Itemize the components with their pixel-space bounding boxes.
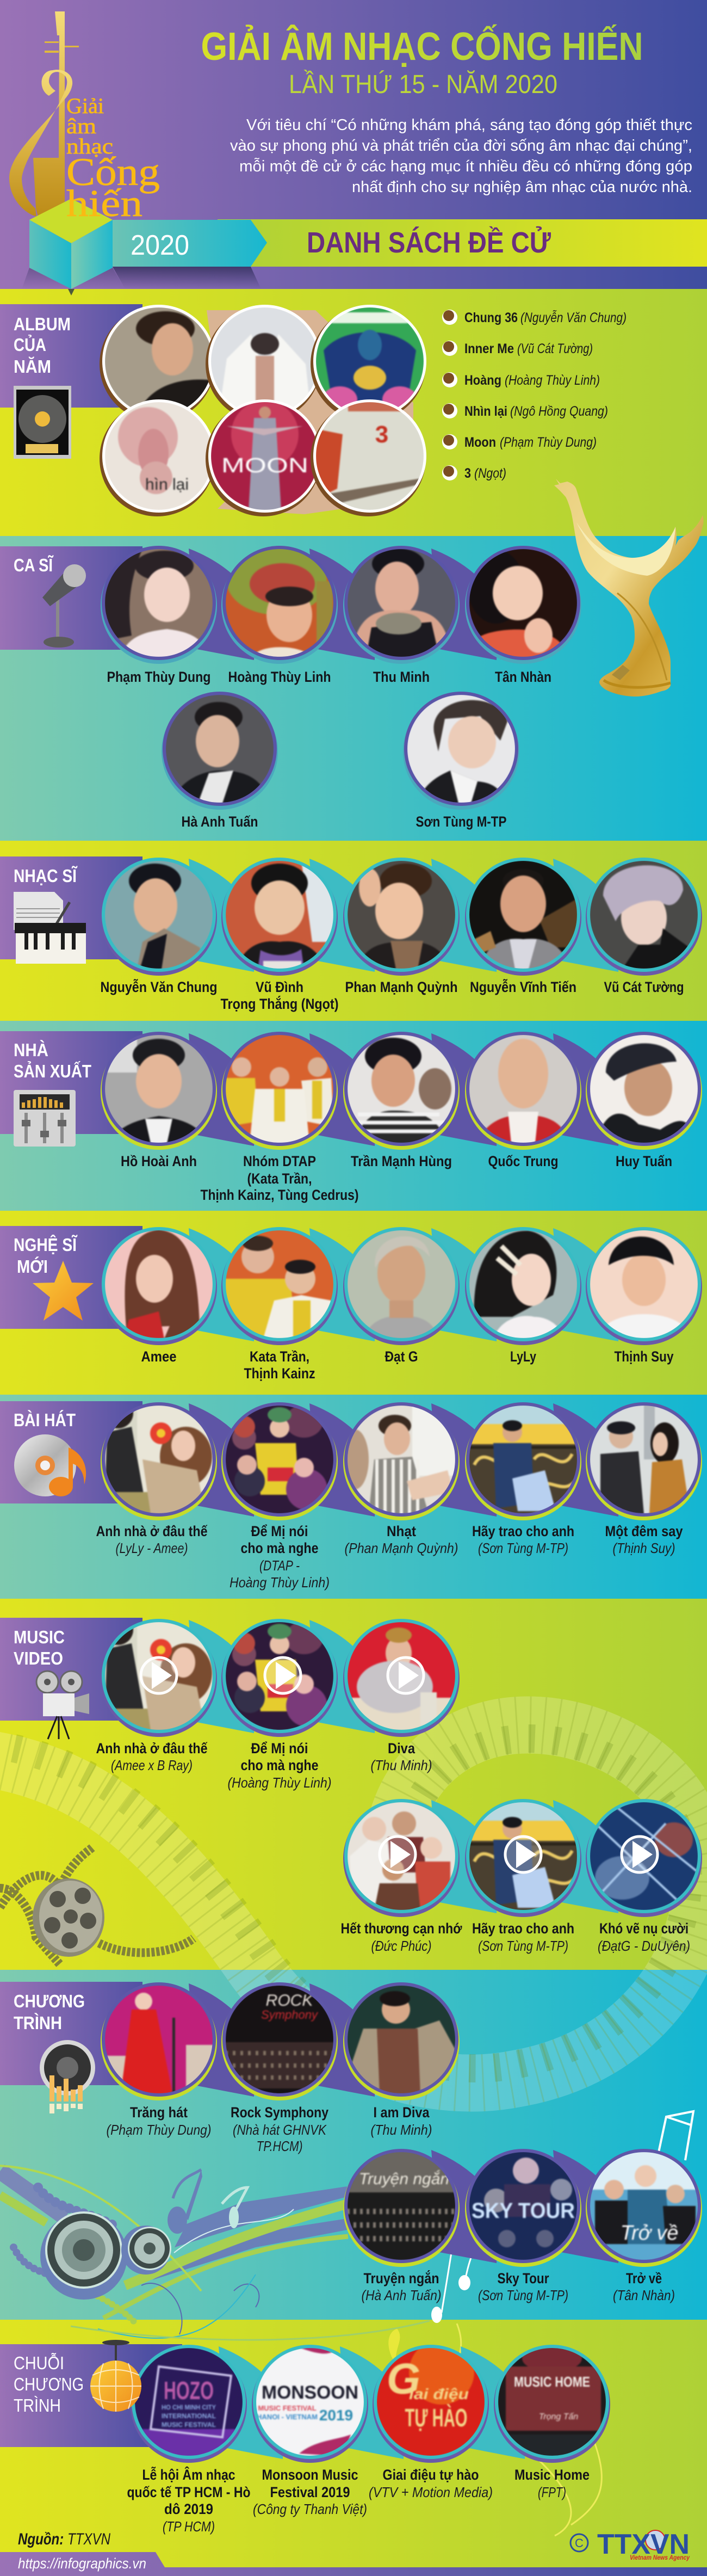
heading: new artist: NGHỆ SĨ [14, 1235, 78, 1255]
nominee: Monsoon: Monsoon Music [262, 2467, 358, 2483]
nominee: Nhạt: Nhạt [387, 1523, 416, 1539]
nominee MV: Để Mị nói cho mà nghe [221, 1619, 338, 1791]
nominee: Monsoon: MONSOON [262, 2382, 358, 2403]
nomination list heading: DANH SÁCH ĐỀ CỬ [307, 226, 551, 259]
logo text: nhạc [66, 134, 113, 158]
album list: Chung 36 [464, 310, 518, 325]
nominee: Hoàng Thùy Linh: Hoàng Thùy Linh [228, 669, 331, 685]
panel: new artists [0, 1226, 702, 1382]
icon: movie camera [36, 1671, 89, 1739]
nominee: Sky Tour: SKY TOUR [472, 2199, 575, 2223]
nominee: HOZO: INTERNATIONAL [162, 2412, 216, 2420]
title: LẦN THỨ 15 - NĂM 2020 [289, 70, 557, 99]
intro paragraph: nhất định cho sự nghiệp âm nhạc của nước nhà. [352, 178, 692, 196]
heading: new artist: MỚI [17, 1256, 48, 1277]
nominee: Tân Nhàn: Tân Nhàn [495, 669, 551, 685]
heading: program: CHƯƠNG [14, 1991, 85, 2011]
nominee: Monsoon: Festival 2019 [270, 2484, 350, 2500]
album: Hoàng [311, 305, 426, 422]
nominee: Trở về [586, 2149, 702, 2303]
nominee MV: Diva: (Thu Minh) [371, 1757, 432, 1773]
nominee: Tân Nhàn [465, 546, 581, 685]
nominee: Monsoon: MUSIC FESTIVAL [258, 2404, 317, 2412]
nominee: Truyện ngắn: Truyện ngắn [363, 2270, 439, 2287]
nominee MV: Diva: Diva [388, 1740, 415, 1757]
nominee: HOZO: quốc tế TP HCM - Hò [127, 2484, 250, 2500]
icon: microphone [42, 564, 86, 648]
heading: producer [14, 1040, 91, 1081]
nominee MV: Diva [343, 1619, 460, 1773]
nominee: Giai điệu tự hào [369, 2339, 493, 2500]
nominee: Rock Symphony: Symphony [261, 2008, 319, 2022]
nominee: Trần Mạnh Hùng: Trần Mạnh Hùng [351, 1153, 452, 1169]
heading: producer: NHÀ [14, 1040, 48, 1060]
album list [442, 310, 627, 481]
nominee: Giai điệu tự hào: G [387, 2355, 420, 2403]
nominee: Monsoon: 2019 [319, 2407, 353, 2424]
nominee: Sky Tour: Sky Tour [497, 2270, 549, 2287]
album list: (Vũ Cát Tường) [517, 341, 593, 356]
nominee: Vũ Đình Trọng Thắng: Trọng Thắng (Ngọt) [221, 995, 338, 1012]
heading: music video: VIDEO [14, 1648, 63, 1668]
intro paragraph: mỗi một đề cử ở các hạng mục ít nhiều đều có những đóng góp [239, 157, 692, 175]
nominee: Để Mị nói cho mà nghe [221, 1402, 338, 1591]
icon: mixer [14, 1090, 76, 1147]
album list: Inner Me [464, 341, 514, 356]
nominee: Nhạt [342, 1402, 460, 1556]
nominee: Truyện ngắn [343, 2149, 460, 2303]
nominee: Rock Symphony: (Nhà hát GHNVK [233, 2122, 327, 2138]
nominee: HOZO: HO CHI MINH CITY [162, 2404, 216, 2411]
nominee: Thu Minh [343, 546, 460, 685]
nominee: Phạm Thùy Dung [101, 546, 217, 685]
nominee: Rock Symphony: ROCK [266, 1992, 314, 2010]
nominee: HOZO: HOZO [164, 2376, 214, 2405]
album list: Hoàng [464, 373, 501, 388]
nominee: Hồ Hoài Anh [101, 1032, 217, 1169]
logo: TTXVN: Vietnam News Agency [630, 2554, 690, 2561]
logo: TTXVN: C [575, 2536, 584, 2550]
heading: music video: MUSIC [14, 1627, 65, 1647]
nominee: Nhóm DTAP: Thịnh Kainz, Tùng Cedrus) [200, 1187, 359, 1203]
nominee: HOZO: Lễ hội Âm nhạc [142, 2466, 235, 2483]
logo text: âm [66, 114, 96, 138]
album list: (Hoàng Thùy Linh) [505, 373, 600, 388]
nominee MV: Hết thương cạn nhớ: Hết thương cạn nhớ [340, 1920, 462, 1937]
nominee: Music Home: Music Home [514, 2467, 590, 2483]
icon: piano and score [14, 892, 86, 964]
nominee: Vũ Cát Tường: Vũ Cát Tường [604, 979, 684, 995]
heading: album [14, 314, 71, 377]
nominee MV: Hãy trao cho anh: Hãy trao cho anh [472, 1920, 574, 1937]
nominee: Hồ Hoài Anh: Hồ Hoài Anh [121, 1153, 197, 1169]
nominee MV: Để Mị nói cho mà nghe: (Hoàng Thùy Linh) [227, 1774, 332, 1791]
logo text: hiến [66, 183, 142, 225]
heading: singer: CA SĨ [14, 555, 54, 575]
heading: composer: NHẠC SĨ [14, 866, 78, 886]
icon: gold record [14, 386, 71, 459]
footer bar with url: https://infographics.vn [18, 2555, 146, 2572]
nominee: Giai điệu tự hào: (VTV + Motion Media) [369, 2484, 493, 2500]
nominee: Music Home: MUSIC HOME [514, 2374, 590, 2390]
nominee: LyLy [465, 1227, 581, 1365]
nominee: Trăng hát [101, 1982, 217, 2138]
panel: singers [0, 546, 581, 830]
logo text: Giải [66, 94, 104, 118]
nominee: Rock Symphony: Rock Symphony [231, 2104, 328, 2121]
nominee: I am Diva: I am Diva [373, 2104, 430, 2121]
heading: new artist [14, 1235, 78, 1277]
nominee MV: Anh nhà ở đâu thế: Anh nhà ở đâu thế [96, 1740, 208, 1757]
icon: big speakers [40, 2211, 171, 2300]
nominee: Music Home [494, 2345, 610, 2500]
nominee MV: Hết thương cạn nhớ: (Đức Phúc) [371, 1938, 432, 1954]
nominee: Kata Trần, Thịnh Kainz: Kata Trần, [250, 1348, 309, 1365]
panel: program series [0, 2339, 610, 2535]
nominee: Sơn Tùng M-TP: Sơn Tùng M-TP [415, 814, 507, 830]
nominee MV: Khó vẽ nụ cười: (ĐạtG - DuUyên) [598, 1938, 690, 1954]
heading: music video [14, 1627, 65, 1668]
album list: (Ngô Hồng Quang) [510, 404, 608, 419]
nominee: Để Mị nói cho mà nghe: (DTAP - [259, 1557, 300, 1574]
header: award logo [9, 11, 79, 217]
nominee MV: Để Mị nói cho mà nghe: Để Mị nói [251, 1740, 308, 1757]
nominee: Nhóm DTAP: (Kata Trần, [247, 1170, 312, 1187]
album: 3: 3 [375, 421, 388, 448]
panel: album of the year [0, 304, 627, 516]
source: Nguồn: TTXVN [18, 2530, 110, 2548]
nominee: Để Mị nói cho mà nghe: cho mà nghe [240, 1540, 319, 1556]
nominee: Nguyễn Văn Chung [100, 858, 218, 995]
nominee MV: Khó vẽ nụ cười: Khó vẽ nụ cười [599, 1920, 689, 1937]
heading: producer: SẢN XUẤT [14, 1061, 91, 1081]
nominee: Vũ Cát Tường [586, 858, 702, 995]
icon: disc and note [14, 1434, 86, 1496]
icon: speaker with bars [40, 2040, 95, 2113]
nominee: Phan Mạnh Quỳnh [343, 858, 460, 995]
nominee: Một đêm say: Một đêm say [605, 1523, 683, 1539]
nominee: Monsoon: HANOI - VIETNAM [257, 2413, 318, 2421]
album: Moon: MOON [221, 454, 308, 477]
heading: song: BÀI HÁT [14, 1410, 76, 1430]
nominee: Một đêm say [586, 1402, 702, 1556]
nominee: HOZO [127, 2345, 250, 2535]
nominee: Trở về: (Tân Nhàn) [613, 2287, 675, 2303]
nominee: Quốc Trung: Quốc Trung [488, 1153, 558, 1169]
nominee MV: Khó vẽ nụ cười [586, 1799, 702, 1954]
nominee: Thu Minh: Thu Minh [373, 669, 430, 685]
nominee: I am Diva [343, 1982, 460, 2138]
album: Moon [206, 399, 321, 516]
nominee: Nguyễn Vĩnh Tiến [465, 858, 581, 995]
icon: golden bird trophy [554, 479, 704, 697]
nominee: Anh nhà ở đâu thế: Anh nhà ở đâu thế [96, 1523, 208, 1539]
nominee: Nhóm DTAP [200, 1032, 359, 1203]
nominee: Hãy trao cho anh: (Sơn Tùng M-TP) [478, 1540, 568, 1556]
nominee: Đạt G [343, 1227, 460, 1365]
heading: album: ALBUM [14, 314, 71, 334]
nominee: Vũ Đình Trọng Thắng: Vũ Đình [256, 979, 303, 995]
album: 3 [311, 399, 426, 516]
nominee: Trở về: Trở về [626, 2270, 662, 2287]
album: Chung 36 [100, 305, 211, 411]
nominee: Hà Anh Tuấn: Hà Anh Tuấn [182, 814, 258, 830]
nominee: Đạt G: Đạt G [385, 1348, 418, 1365]
heading: program [14, 1991, 85, 2033]
panel: programs [0, 1982, 702, 2303]
intro paragraph: vào sự phong phú và phát triển của đời sống âm nhạc đại chúng”, [230, 137, 692, 155]
heading: program series: CHUỖI [14, 2353, 64, 2373]
nominee: Một đêm say: (Thịnh Suy) [612, 1540, 675, 1556]
nominee: Quốc Trung [465, 1032, 581, 1169]
album list: Moon [464, 435, 496, 450]
nominee: Truyện ngắn: (Hà Anh Tuấn) [361, 2287, 442, 2303]
nominee: Trăng hát: (Phạm Thùy Dung) [107, 2122, 211, 2138]
panel: music video [0, 1614, 702, 1964]
nominee: Hà Anh Tuấn [162, 692, 278, 830]
nominee: Anh nhà ở đâu thế: (LyLy - Amee) [115, 1540, 188, 1556]
nominee: I am Diva: (Thu Minh) [371, 2122, 432, 2138]
album: Inner Me [206, 305, 317, 411]
heading: program series [14, 2353, 84, 2415]
icon: star [33, 1261, 94, 1321]
nominee: Amee [101, 1227, 217, 1365]
nominee: Truyện ngắn: Truyện ngắn [359, 2170, 449, 2188]
heading: album: NĂM [14, 356, 51, 377]
nominee: Sky Tour: (Sơn Tùng M-TP) [478, 2287, 568, 2303]
icon: disco ball [90, 2340, 141, 2412]
nominee: Giai điệu tự hào: TỰ HÀO [405, 2404, 468, 2432]
panel: producers [0, 1031, 702, 1203]
title: GIẢI ÂM NHẠC CỐNG HIẾN [201, 24, 643, 69]
year label: 2020 [131, 230, 189, 261]
nominee: Monsoon [252, 2345, 368, 2517]
nominee: Trăng hát: Trăng hát [130, 2104, 188, 2121]
nominee MV: Hết thương cạn nhớ [340, 1799, 462, 1954]
nominee: Sky Tour [465, 2149, 581, 2303]
nominee: Hãy trao cho anh [465, 1402, 581, 1556]
nominee MV: Hãy trao cho anh [465, 1799, 581, 1954]
album list: (Phạm Thùy Dung) [500, 435, 597, 450]
heading: program: TRÌNH [14, 2013, 62, 2033]
nominee: Kata Trần, Thịnh Kainz [221, 1227, 338, 1382]
header: gem box and year ribbon [22, 199, 707, 295]
icon: film reel and strip [0, 1847, 194, 1964]
nominee: Anh nhà ở đâu thế [96, 1398, 217, 1556]
album list: (Ngọt) [474, 466, 506, 481]
nominee: Amee: Amee [141, 1348, 176, 1365]
nominee: HOZO: MUSIC FESTIVAL [162, 2421, 216, 2429]
nominee: Giai điệu tự hào: Giai điệu tự hào [383, 2467, 479, 2483]
nominee: Thịnh Suy: Thịnh Suy [615, 1348, 673, 1365]
nominee: HOZO: (TP HCM) [163, 2518, 215, 2535]
album list: 3 [464, 466, 471, 481]
nominee: Kata Trần, Thịnh Kainz: Thịnh Kainz [244, 1365, 315, 1382]
background: music swirl and notes [0, 2111, 693, 2536]
nominee: Rock Symphony [221, 1982, 338, 2154]
nominee: Hãy trao cho anh: Hãy trao cho anh [472, 1523, 574, 1539]
nominee: Huy Tuấn [586, 1032, 702, 1169]
nominee: HOZO: dô 2019 [164, 2501, 213, 2517]
album: Nhìn lại [100, 399, 215, 516]
nominee: Huy Tuấn: Huy Tuấn [616, 1153, 672, 1169]
logo: TTXVN: TTXVN [597, 2529, 690, 2560]
nominee: Monsoon: (Công ty Thanh Việt) [253, 2501, 367, 2517]
nominee: Nguyễn Vĩnh Tiến: Nguyễn Vĩnh Tiến [470, 978, 576, 995]
nominee: Nguyễn Văn Chung: Nguyễn Văn Chung [100, 978, 218, 995]
nominee: Hoàng Thùy Linh [221, 546, 338, 685]
title [201, 24, 643, 99]
nominee: Nhạt: (Phan Mạnh Quỳnh) [345, 1540, 458, 1556]
nominee: Giai điệu tự hào: iai điệu [409, 2386, 469, 2402]
nominee: Music Home: (FPT) [538, 2484, 566, 2500]
nominee: Vũ Đình Trọng Thắng [221, 858, 338, 1012]
nominee: Để Mị nói cho mà nghe: Hoàng Thùy Linh) [230, 1574, 330, 1591]
logo text [66, 94, 160, 225]
nominee: Trần Mạnh Hùng [343, 1032, 460, 1169]
nominee: Nhóm DTAP: Nhóm DTAP [243, 1153, 316, 1169]
heading: album: CỦA [14, 335, 46, 355]
nominee MV: Anh nhà ở đâu thế [96, 1614, 217, 1773]
heading: program series: TRÌNH [14, 2395, 61, 2415]
nominee: Trở về: Trở về [621, 2222, 678, 2245]
nominee: LyLy: LyLy [510, 1348, 536, 1365]
background: piano keyboard spiral [0, 1725, 702, 2083]
footer bar with url [0, 2552, 707, 2576]
nominee MV: Hãy trao cho anh: (Sơn Tùng M-TP) [478, 1938, 568, 1954]
intro paragraph [230, 116, 692, 196]
intro paragraph: Với tiêu chí “Có những khám phá, sáng tạo đóng góp thiết thực [246, 116, 692, 134]
album list: Nhìn lại [464, 404, 507, 419]
nominee: Rock Symphony: TP.HCM) [257, 2138, 302, 2154]
nominee: Music Home: Trọng Tấn [539, 2412, 578, 2421]
heading: program series: CHƯƠNG [14, 2374, 84, 2394]
nominee: Sơn Tùng M-TP [403, 692, 519, 830]
logo text: Cống [66, 150, 160, 194]
panel: songs [0, 1398, 702, 1591]
nominee: Thịnh Suy [586, 1227, 702, 1365]
nominee: Để Mị nói cho mà nghe: Để Mị nói [251, 1523, 308, 1539]
nominee: Phạm Thùy Dung: Phạm Thùy Dung [107, 669, 211, 685]
panel: composers [0, 856, 702, 1012]
album list: (Nguyễn Văn Chung) [520, 310, 627, 325]
nominee: Phan Mạnh Quỳnh: Phan Mạnh Quỳnh [345, 979, 458, 995]
nominee MV: Anh nhà ở đâu thế: (Amee x B Ray) [111, 1757, 193, 1773]
album: Nhìn lại: hìn lại [145, 476, 189, 494]
nominee MV: Để Mị nói cho mà nghe: cho mà nghe [240, 1757, 319, 1773]
